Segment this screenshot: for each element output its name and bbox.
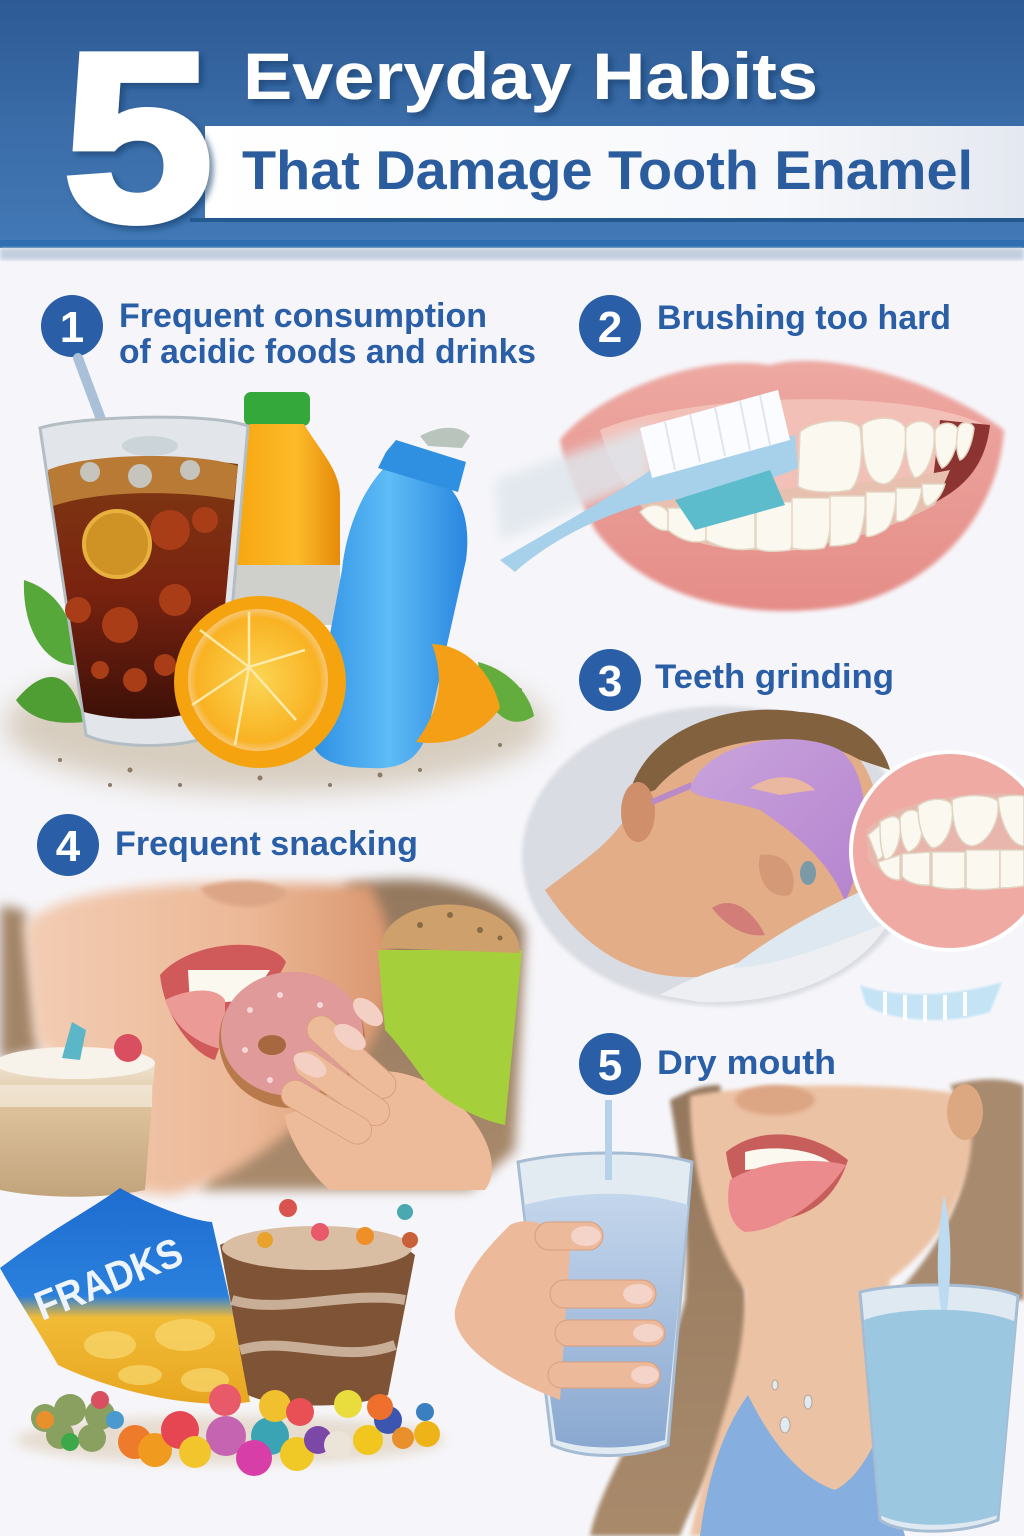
heading 2: Brushing too hard <box>657 299 951 337</box>
mouth guard <box>860 982 1002 1022</box>
face, neck and chest <box>690 1085 972 1536</box>
badge 3: 3 <box>598 657 622 706</box>
glass of water <box>860 1195 1018 1531</box>
small orange wedge <box>416 644 500 743</box>
panel 3: teeth grinding <box>522 649 1024 1022</box>
heading 3: Teeth grinding <box>655 658 894 696</box>
halved orange <box>174 596 346 768</box>
illustration: mouth and toothbrush <box>495 361 1004 611</box>
badge 1: 1 <box>60 303 84 352</box>
pillow <box>660 920 890 1002</box>
illustration: woman with water <box>455 1079 1024 1536</box>
blue top <box>700 1395 905 1536</box>
lips and mouth <box>160 945 286 1060</box>
header banner <box>0 0 1024 271</box>
hair <box>590 1085 747 1536</box>
big number 5: 5 <box>63 3 213 271</box>
gum and mouth <box>600 399 985 551</box>
hand <box>276 993 492 1190</box>
heading 5: Dry mouth <box>657 1044 836 1082</box>
panel 5: dry mouth <box>455 1033 1024 1536</box>
title line 2: That Damage Tooth Enamel <box>242 139 973 201</box>
panel 1: acidic foods and drinks <box>3 295 547 793</box>
badge 2: 2 <box>598 303 622 352</box>
heading 1: Frequent consumption <box>119 297 487 335</box>
badge 4 <box>37 814 99 876</box>
badge 5 <box>579 1033 641 1095</box>
toothbrush <box>495 390 798 572</box>
orange bottle <box>232 392 340 625</box>
heading 4: Frequent snacking <box>115 825 418 863</box>
heading 1: of acidic foods and drinks <box>119 333 536 371</box>
held glass <box>518 1100 692 1456</box>
inset teeth circle <box>849 750 1024 952</box>
badge 3 <box>579 649 641 711</box>
snack cup <box>220 1199 418 1406</box>
illustration: woman eating donut <box>0 879 525 1476</box>
badge 5: 5 <box>598 1041 622 1090</box>
green cup with muffin <box>378 904 522 1125</box>
glass of cola <box>40 417 248 745</box>
badge 1 <box>41 295 103 357</box>
lips and tongue <box>726 1134 848 1220</box>
nose <box>200 881 288 907</box>
nose and eye <box>759 854 794 896</box>
heading 1 <box>119 297 536 371</box>
donut <box>219 972 365 1108</box>
panel 4: frequent snacking <box>0 814 525 1476</box>
teeth <box>640 418 974 551</box>
badge 4: 4 <box>56 822 81 871</box>
hand <box>455 1221 665 1400</box>
snack bag: FRADKS <box>28 1229 189 1329</box>
candies <box>15 1384 445 1476</box>
lips <box>560 361 1004 611</box>
badge 2 <box>579 295 641 357</box>
illustration: drinks and citrus <box>3 358 547 793</box>
panel 2: brushing too hard <box>495 295 1004 611</box>
water drops on chest <box>772 1380 812 1433</box>
latte cup <box>0 1022 155 1197</box>
illustration: sleeping man <box>522 706 1024 1022</box>
title band <box>190 126 1024 222</box>
sleep mask <box>690 739 865 902</box>
title line 1: Everyday Habits <box>243 39 818 113</box>
blue bottle <box>312 428 470 768</box>
straw <box>78 358 120 470</box>
snack bag <box>0 1188 250 1404</box>
